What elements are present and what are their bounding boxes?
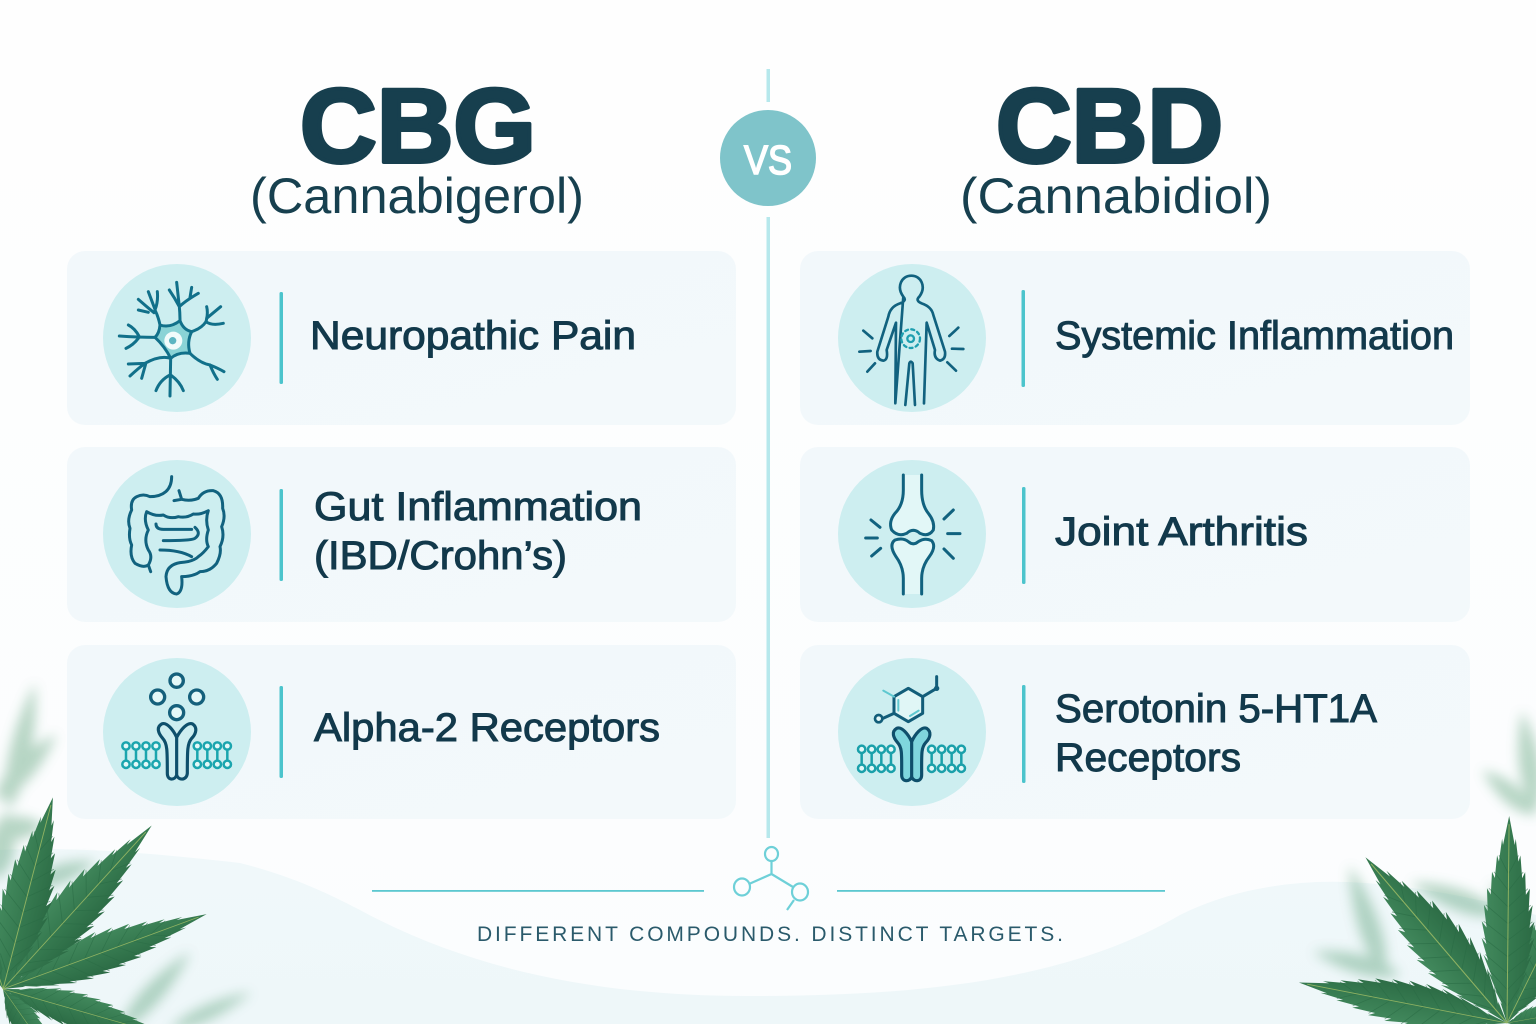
label: Receptors bbox=[1055, 736, 1241, 780]
VS badge: VS bbox=[744, 137, 792, 183]
label bbox=[1055, 687, 1377, 780]
icon: human body bbox=[859, 276, 963, 405]
panel: Neuropathic Pain bbox=[67, 251, 736, 425]
label: Joint Arthritis bbox=[1055, 510, 1308, 554]
panel: Serotonin 5-HT1A Receptors bbox=[800, 645, 1470, 819]
icon: serotonin receptor bbox=[858, 677, 965, 781]
label: Gut Inflammation bbox=[314, 485, 642, 529]
panel: Alpha-2 Receptors bbox=[67, 645, 736, 819]
label: Neuropathic Pain bbox=[310, 314, 636, 358]
label: Serotonin 5-HT1A bbox=[1055, 687, 1377, 731]
divider bbox=[280, 292, 283, 384]
icon: alpha-2 receptor bbox=[122, 674, 231, 779]
bottom wave bbox=[0, 849, 1536, 1024]
left cannabis leaf bbox=[0, 791, 214, 1024]
center divider line bbox=[766, 69, 770, 838]
heading: CBG: CBG bbox=[300, 68, 536, 185]
heading: CBD: CBD bbox=[996, 68, 1223, 185]
divider bbox=[1022, 685, 1026, 783]
footer rule left bbox=[372, 890, 704, 892]
divider bbox=[1022, 487, 1026, 584]
label: Alpha-2 Receptors bbox=[314, 706, 660, 750]
divider bbox=[280, 686, 283, 778]
divider bbox=[1022, 290, 1025, 387]
footer rule right bbox=[837, 890, 1165, 892]
heading: CBG: (Cannabigerol) bbox=[250, 168, 584, 224]
label: (IBD/Crohn’s) bbox=[314, 534, 567, 578]
panel: Joint Arthritis bbox=[800, 447, 1470, 622]
icon: intestines bbox=[129, 477, 224, 594]
heading: CBD: (Cannabidiol) bbox=[960, 168, 1272, 224]
panel: Gut Inflammation bbox=[67, 447, 736, 622]
tagline: DIFFERENT COMPOUNDS. DISTINCT TARGETS. bbox=[477, 923, 1063, 946]
heading: CBD bbox=[960, 68, 1272, 224]
label: Systemic Inflammation bbox=[1055, 314, 1454, 358]
VS badge bbox=[720, 110, 816, 206]
right cannabis leaf bbox=[1295, 816, 1536, 1024]
blurred background leaves bbox=[0, 681, 1536, 1024]
heading: CBG bbox=[250, 68, 584, 224]
divider bbox=[280, 489, 283, 581]
icon: neuron bbox=[119, 282, 224, 396]
icon: molecule bbox=[734, 847, 808, 910]
icon: knee joint bbox=[866, 475, 960, 594]
panel: Systemic Inflammation bbox=[800, 251, 1470, 425]
label bbox=[314, 485, 642, 578]
